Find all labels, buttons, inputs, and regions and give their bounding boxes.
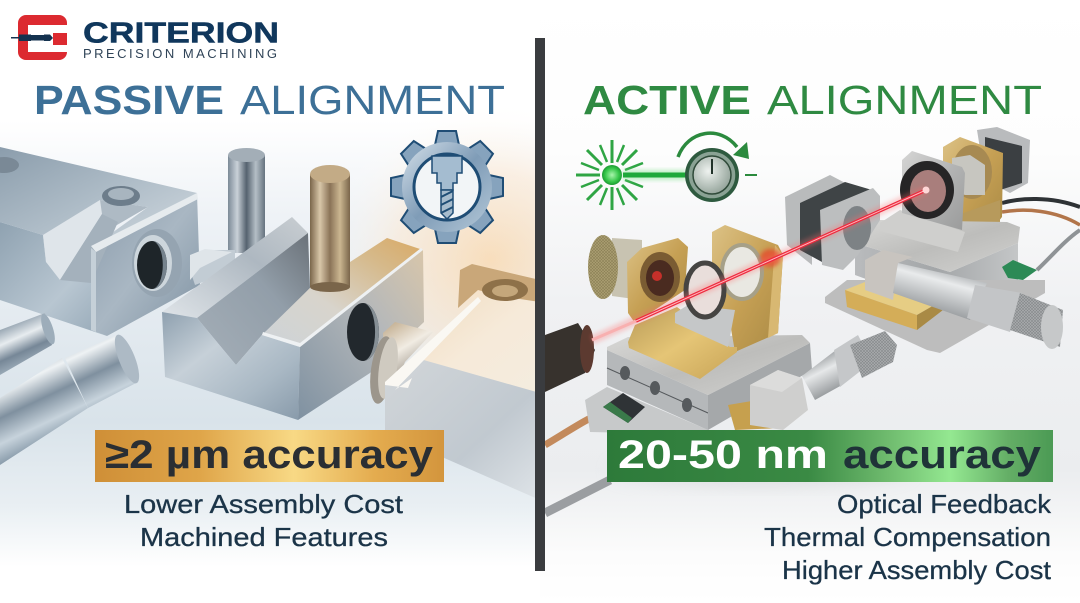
motor stage plate stack [855, 210, 1020, 310]
heading: active alignment: ACTIVE [583, 77, 751, 123]
icon: laser source and feedback knob [576, 133, 757, 210]
panel: active alignment [540, 0, 1080, 603]
front stage [585, 335, 812, 435]
center divider [535, 38, 545, 571]
warm glow [320, 100, 660, 420]
steel dowel pin [228, 148, 265, 253]
panel background [0, 0, 540, 603]
short cross shaft [190, 249, 235, 285]
active feature list [764, 489, 1052, 585]
gold right plate [712, 225, 783, 352]
passive feature list: Machined Features [140, 522, 388, 552]
front micrometer [728, 331, 897, 430]
objective barrel [545, 323, 595, 392]
front lens mount plate [900, 151, 965, 230]
logo [11, 15, 279, 61]
callout: passive accuracy: ≥2 µm accuracy [105, 433, 434, 477]
rear stepper motor [977, 127, 1030, 193]
gold bracket base [628, 307, 737, 379]
active feature list: Thermal Compensation [764, 522, 1051, 552]
bronze dowel pin [310, 165, 350, 292]
green beam [623, 170, 686, 180]
panel background [540, 0, 1080, 603]
red laser beam [592, 186, 930, 340]
heading: active alignment: ALIGNMENT [767, 77, 1042, 123]
corner block [385, 264, 540, 500]
passive feature list: Lower Assembly Cost [124, 489, 404, 519]
tagline: PRECISION MACHINING [83, 46, 277, 61]
knurled knob [588, 235, 642, 300]
gold mount plate [943, 137, 1003, 250]
machined block with notch [0, 147, 200, 336]
active feature list: Higher Assembly Cost [782, 555, 1052, 585]
left stepper motor [785, 175, 880, 270]
dial knob [685, 148, 739, 202]
gold lens block [627, 238, 688, 323]
callout: active accuracy: 20-50 nm [618, 433, 828, 477]
back cables [1002, 199, 1080, 270]
panel: passive alignment [0, 0, 660, 603]
rear micrometer [865, 250, 1063, 349]
cable connector [603, 393, 645, 423]
upper left pin [0, 312, 58, 375]
logo mark [11, 15, 67, 60]
gear and end mill icon [391, 131, 503, 243]
V-groove block [162, 217, 424, 420]
rear base and gold slide [825, 280, 1045, 353]
minus mark [745, 174, 757, 176]
rotation arrow [678, 133, 749, 159]
active feature list: Optical Feedback [837, 489, 1052, 519]
heading: passive alignment: ALIGNMENT [240, 77, 505, 123]
brand name: CRITERION [83, 18, 279, 50]
lens holder [675, 263, 735, 347]
callout: active accuracy: accuracy [843, 433, 1042, 477]
left cables [545, 410, 610, 513]
bronze cross shaft [366, 322, 433, 405]
heading: passive alignment: PASSIVE [34, 77, 224, 123]
bench shadow [610, 454, 910, 486]
laser burst [576, 140, 648, 210]
passive feature list [124, 489, 404, 552]
callout: active accuracy [607, 430, 1053, 482]
stepped round shaft [0, 332, 144, 465]
